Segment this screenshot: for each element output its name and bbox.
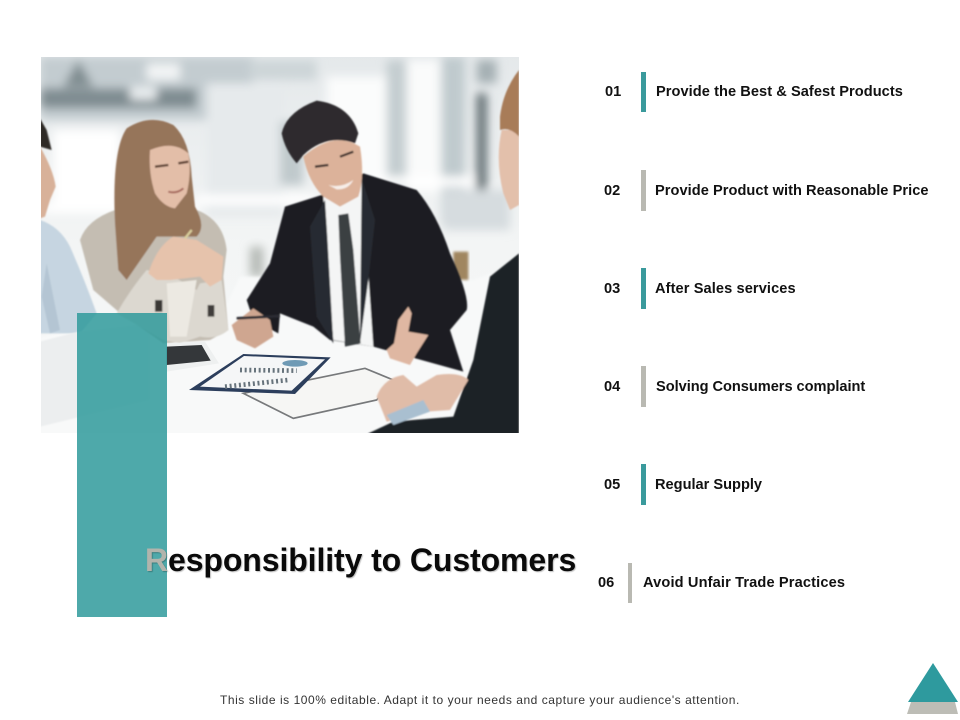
teal vertical block: [77, 313, 167, 617]
list item 01: [605, 72, 903, 112]
tablet: [167, 342, 219, 372]
woman: [80, 120, 228, 343]
list item 05: [604, 464, 762, 505]
documents: [189, 354, 393, 418]
list item 01: 01: [605, 84, 621, 100]
list item 05: 05: [604, 477, 620, 493]
list item 03: [604, 268, 796, 309]
list item 03: After Sales services: [655, 281, 796, 297]
laptop: [41, 332, 77, 426]
list item 02: [604, 170, 929, 211]
list item 04: Solving Consumers complaint: [656, 379, 865, 395]
photo: business meeting: [41, 57, 519, 433]
list item 01: Provide the Best & Safest Products: [656, 84, 903, 100]
list item 03: 03: [604, 281, 620, 297]
list item 04: [604, 366, 866, 407]
list item 02: 02: [604, 183, 620, 199]
table: [246, 276, 470, 288]
list item 02: Provide Product with Reasonable Price: [655, 183, 929, 199]
list item 05: Regular Supply: [655, 477, 762, 493]
chair: [453, 252, 468, 285]
right person: [368, 70, 519, 440]
icon: navigation triangle: [907, 663, 958, 714]
footer note: This slide is 100% editable. Adapt it to your needs and capture your audience's attention.: [220, 693, 740, 707]
left man: [40, 118, 97, 333]
list item 06: Avoid Unfair Trade Practices: [643, 575, 845, 591]
title: Responsibility to Customers: [145, 542, 576, 578]
centre man: [232, 101, 467, 372]
list item 06: [598, 563, 845, 603]
list item 04: 04: [604, 379, 620, 395]
list item 06: 06: [598, 575, 614, 591]
